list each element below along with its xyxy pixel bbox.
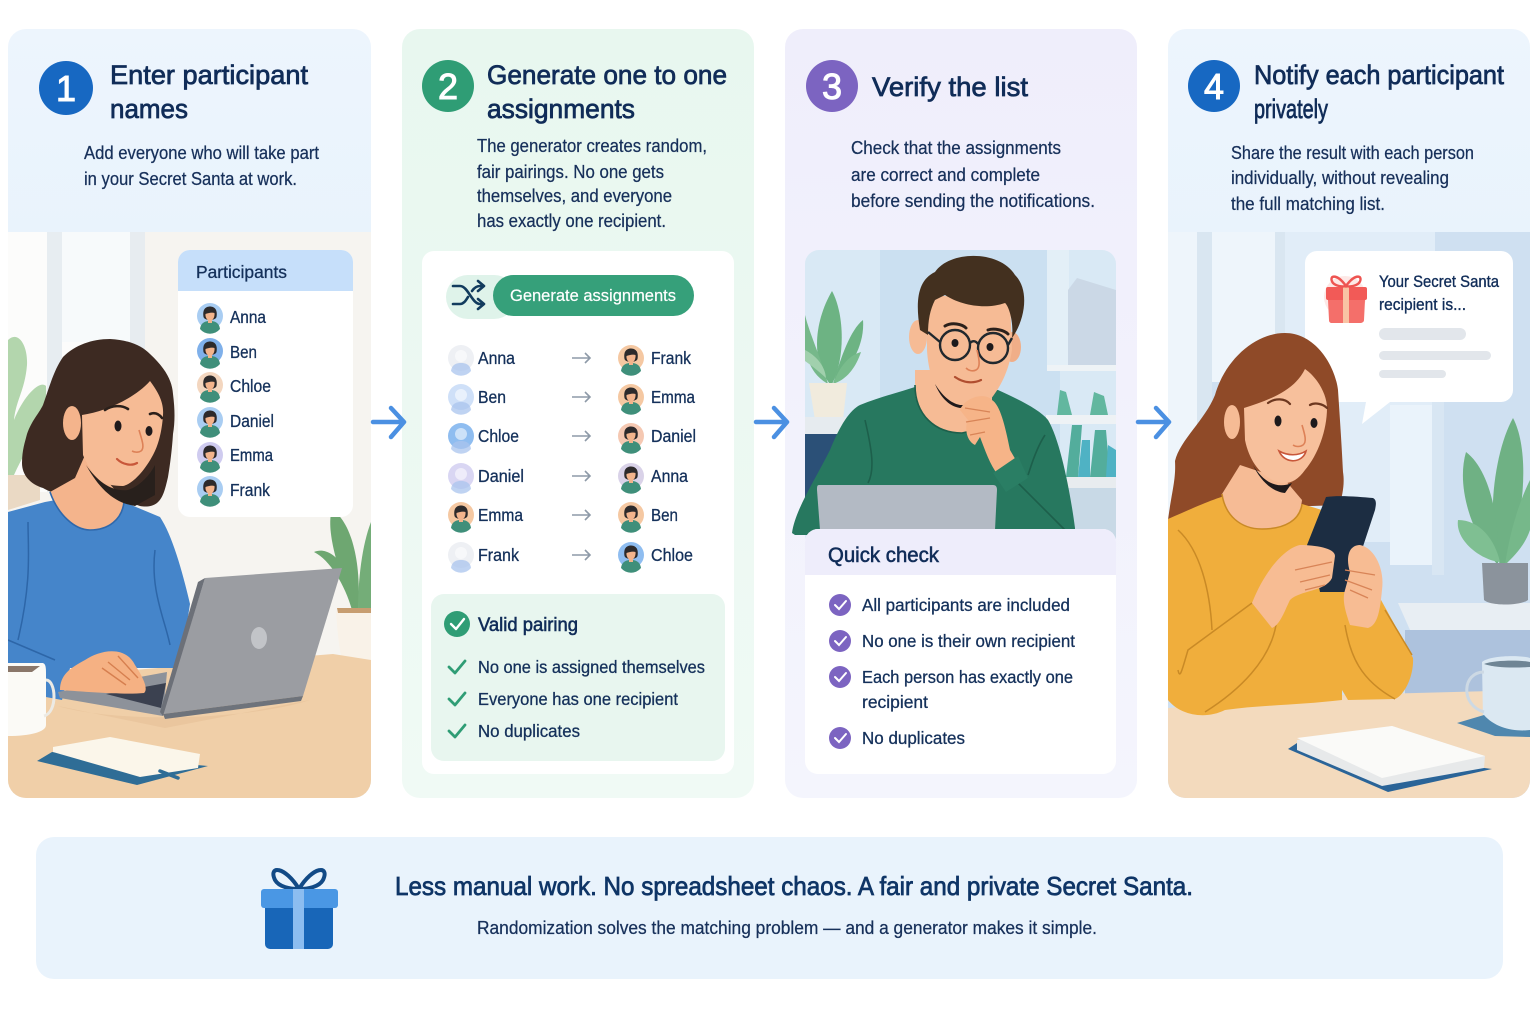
valid pairing box: Everyone has one recipient <box>478 689 678 709</box>
step 3 header: Check that the assignments <box>851 138 1061 158</box>
assignment rows: Daniel <box>478 466 524 486</box>
step 4 header: individually, without revealing <box>1231 168 1449 188</box>
participants card <box>178 250 353 517</box>
participants card: Participants <box>196 262 287 282</box>
arrow 2 to 3 <box>756 408 787 437</box>
panel 3: verify the list <box>785 29 1137 798</box>
step 4 header: privately <box>1254 94 1328 124</box>
speech bubble: recipient is... <box>1379 296 1466 314</box>
step 2 header: The generator creates random, <box>477 136 707 156</box>
step 3 header <box>806 60 1095 211</box>
speech bubble: Your Secret Santa <box>1379 273 1500 291</box>
step 2 header <box>422 60 727 231</box>
step 3 header: are correct and complete <box>851 165 1040 185</box>
assignment rows: Frank <box>651 348 691 368</box>
step 3 header: Verify the list <box>872 72 1029 102</box>
arrow 3 to 4 <box>1138 408 1169 437</box>
assignment rows: Anna <box>651 466 688 486</box>
checklist: No one is their own recipient <box>862 631 1075 651</box>
assignment rows: Anna <box>478 348 515 368</box>
illustration: woman typing on laptop <box>8 232 371 798</box>
checklist: recipient <box>862 692 928 712</box>
step 2 header: Generate one to one <box>487 60 727 90</box>
assignment rows: Emma <box>651 387 695 407</box>
step 1 header: 1 <box>56 68 76 109</box>
panel 4: notify privately <box>1168 29 1530 798</box>
assignment rows: Frank <box>478 545 519 565</box>
step 2 header: has exactly one recipient. <box>477 211 666 231</box>
participant list: Frank <box>230 480 270 500</box>
assignment rows: Chloe <box>478 426 519 446</box>
checklist: No duplicates <box>862 728 965 748</box>
step 2 header: assignments <box>487 94 635 124</box>
quick check card <box>805 529 1116 774</box>
illustration background: room with window and plant <box>1168 232 1530 798</box>
icon: gift <box>261 870 338 949</box>
checklist: Each person has exactly one <box>862 667 1073 687</box>
arrow 1 to 2 <box>373 408 404 437</box>
panel 2: generate assignments <box>402 29 754 798</box>
step 1 header: Add everyone who will take part <box>84 143 319 163</box>
checklist: All participants are included <box>862 595 1070 615</box>
step 1 header: names <box>110 94 188 124</box>
assignment rows: Daniel <box>651 426 696 446</box>
speech bubble <box>1305 251 1513 424</box>
generate button: Generate assignments <box>510 286 676 305</box>
assignment rows: Ben <box>651 505 678 525</box>
assignment rows <box>448 345 696 573</box>
illustration: woman reading phone <box>1168 333 1530 798</box>
step 4 header: the full matching list. <box>1231 194 1385 214</box>
valid pairing box: No duplicates <box>478 721 580 741</box>
participant list: Daniel <box>230 411 274 431</box>
step 1 header: in your Secret Santa at work. <box>84 169 297 189</box>
step 2 header: 2 <box>438 66 458 107</box>
banner text <box>395 871 1193 938</box>
illustration: man with glasses thinking <box>790 250 1116 550</box>
step 2 header: fair pairings. No one gets <box>477 162 664 182</box>
step 2 header: themselves, and everyone <box>477 186 672 206</box>
assignment rows: Ben <box>478 387 506 407</box>
bottom banner <box>36 837 1503 979</box>
quick check card: Quick check <box>828 544 939 567</box>
banner text: Less manual work. No spreadsheet chaos. A fair and private Secret Santa. <box>395 871 1193 901</box>
generate button <box>446 275 694 319</box>
assignment rows: Chloe <box>651 545 693 565</box>
step 4 header: Share the result with each person <box>1231 143 1474 163</box>
participant list: Emma <box>230 445 273 465</box>
banner text: Randomization solves the matching problem — and a generator makes it simple. <box>477 918 1097 938</box>
step 1 header: Enter participant <box>110 60 308 90</box>
participant list: Ben <box>230 342 257 362</box>
participant list: Chloe <box>230 376 271 396</box>
step 4 header: 4 <box>1204 66 1224 107</box>
panel 1: enter participant names <box>8 29 371 798</box>
step 3 header: 3 <box>822 66 842 107</box>
valid pairing box <box>431 594 725 761</box>
participant list <box>197 303 274 507</box>
step 1 header <box>39 60 319 189</box>
valid pairing box: Valid pairing <box>478 615 578 636</box>
participant list: Anna <box>230 307 266 327</box>
valid pairing box: No one is assigned themselves <box>478 657 705 677</box>
assignment rows: Emma <box>478 505 523 525</box>
assignments card <box>422 251 734 774</box>
step 4 header <box>1188 60 1504 214</box>
checklist <box>829 594 1075 749</box>
step 4 header: Notify each participant <box>1254 60 1504 90</box>
gift icon <box>1324 276 1367 323</box>
step 3 header: before sending the notifications. <box>851 191 1095 211</box>
